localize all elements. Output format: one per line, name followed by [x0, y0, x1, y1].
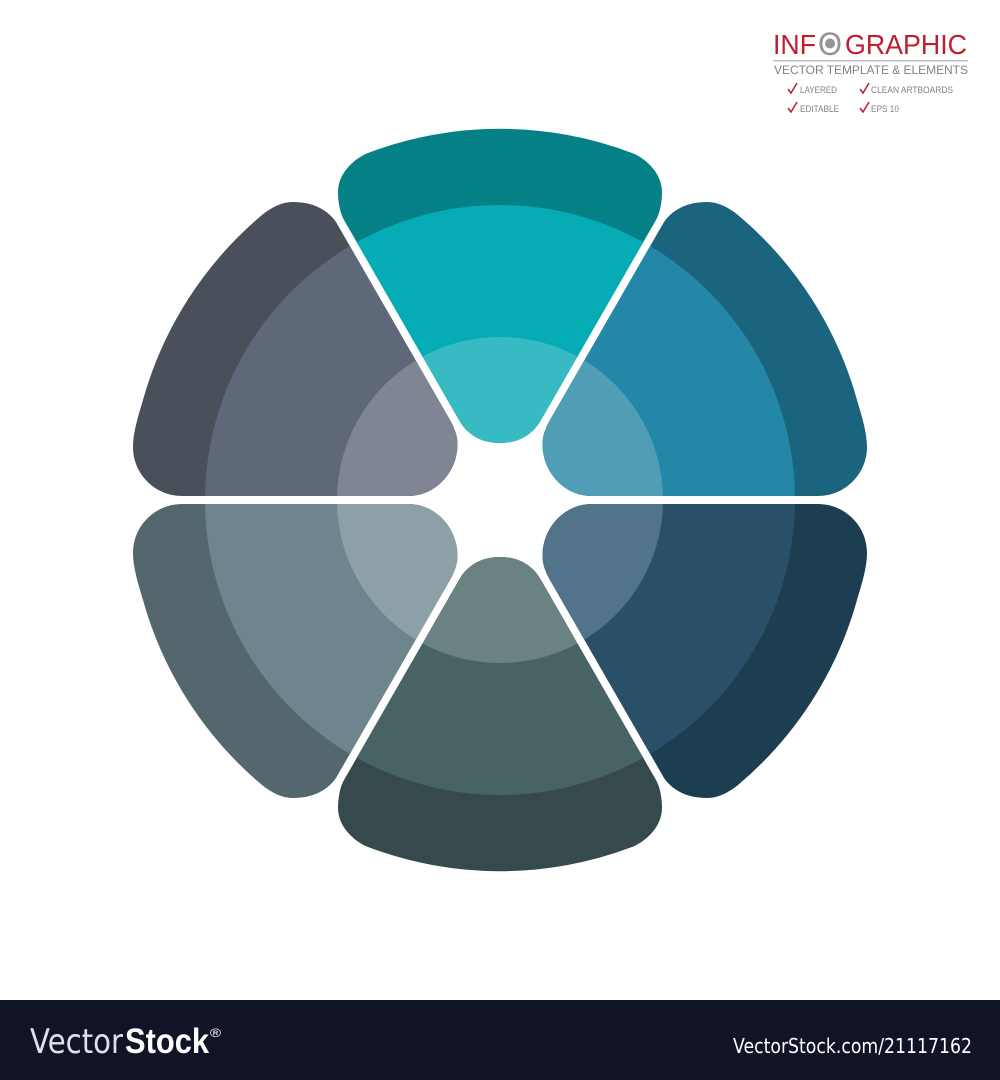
icon: target letter O: O [818, 26, 842, 62]
footer logo: Stock [125, 1022, 209, 1061]
panel: upper right petal [542, 202, 867, 496]
panel: upper left petal [133, 202, 458, 496]
feature: clean artboards [860, 83, 953, 95]
panel: lower right petal [542, 504, 867, 798]
footer logo: ® [210, 1026, 221, 1040]
feature: clean artboards: CLEAN ARTBOARDS [871, 85, 953, 95]
panel: lower left petal [133, 504, 458, 798]
footer logo [30, 1022, 221, 1062]
subtitle: VECTOR TEMPLATE & ELEMENTS [774, 63, 968, 77]
feature: editable: EDITABLE [800, 104, 839, 114]
feature: editable [788, 102, 839, 114]
logo: infographic heading: GRAPHIC [845, 29, 967, 60]
feature list [788, 83, 953, 114]
logo: infographic heading: INF [773, 29, 816, 60]
feature: eps 10 [860, 102, 899, 114]
panel: top petal [338, 129, 662, 443]
footer bar [0, 1000, 1000, 1080]
panel: bottom petal [338, 557, 662, 871]
feature: layered: LAYERED [800, 85, 837, 95]
feature: layered [788, 83, 837, 95]
logo: infographic heading [773, 26, 967, 62]
footer logo: Vector [30, 1022, 123, 1062]
feature: eps 10: EPS 10 [871, 104, 899, 114]
